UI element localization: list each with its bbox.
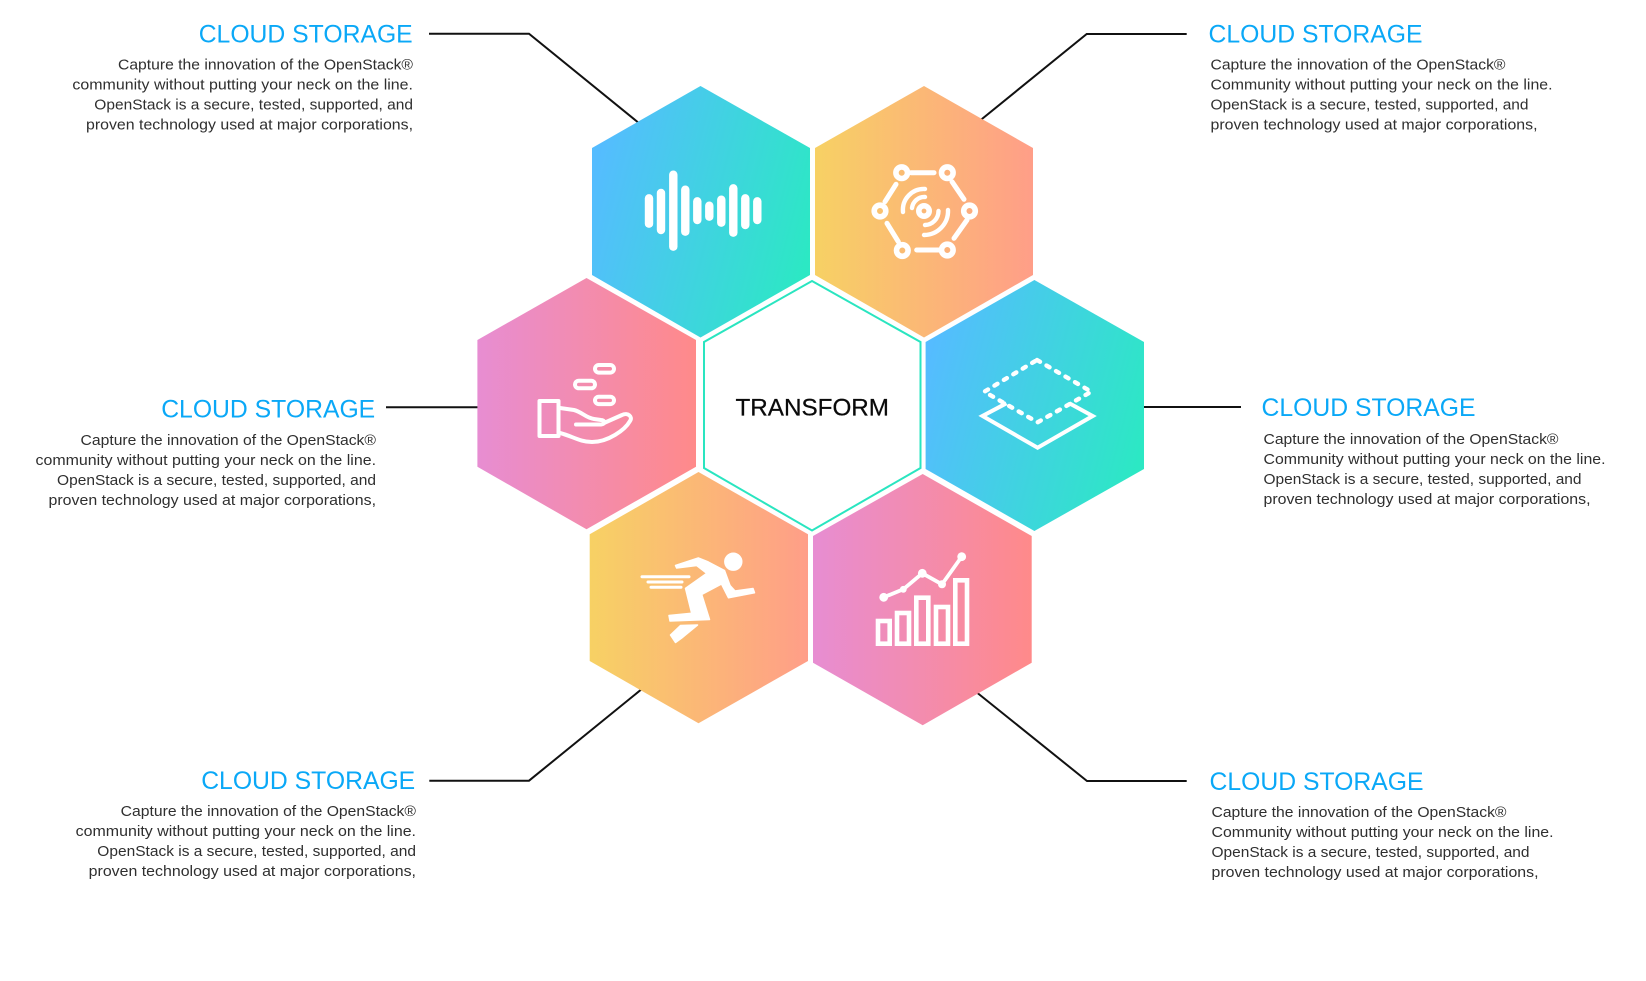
center hexagon with title bbox=[704, 281, 920, 530]
hexagon: blue middle right bbox=[926, 280, 1144, 531]
hexagon: orange top right bbox=[815, 86, 1033, 338]
icon: running person bbox=[642, 552, 754, 642]
heading: CLOUD STORAGE bbox=[1210, 768, 1424, 796]
connector: middle right bbox=[1140, 406, 1241, 408]
body text: Capture the innovation of the OpenStack® bbox=[80, 433, 376, 449]
body text: OpenStack is a secure, tested, supported, and bbox=[1264, 472, 1582, 488]
body text: proven technology used at major corporations, bbox=[1212, 865, 1538, 881]
heading: CLOUD STORAGE bbox=[201, 767, 415, 795]
hexagon: pink bottom right bbox=[813, 474, 1032, 725]
body text: community without putting your neck on the line. bbox=[36, 453, 376, 469]
body text: OpenStack is a secure, tested, supported, and bbox=[1212, 845, 1530, 861]
body text bbox=[1212, 805, 1554, 881]
heading: CLOUD STORAGE bbox=[1208, 21, 1422, 49]
icon: hand with coins bbox=[540, 365, 631, 442]
body text: Capture the innovation of the OpenStack® bbox=[118, 58, 413, 74]
body text: community without putting your neck on the line. bbox=[76, 824, 416, 840]
connector: middle left bbox=[386, 406, 482, 408]
heading: CLOUD STORAGE bbox=[1262, 394, 1476, 422]
body text: proven technology used at major corporations, bbox=[1210, 118, 1538, 134]
body text bbox=[72, 58, 413, 134]
title: transform: TRANSFORM bbox=[736, 395, 889, 422]
panel: text bottom left bbox=[76, 767, 416, 880]
body text bbox=[1264, 432, 1606, 508]
panel: text middle left bbox=[36, 396, 376, 509]
hexagon: pink middle left bbox=[477, 278, 696, 529]
body text: OpenStack is a secure, tested, supported, and bbox=[97, 844, 416, 860]
connector: bottom left bbox=[429, 684, 648, 781]
body text: proven technology used at major corporations, bbox=[1264, 492, 1590, 508]
hexagon: blue top left bbox=[592, 86, 810, 338]
body text: OpenStack is a secure, tested, supported, and bbox=[57, 473, 376, 489]
heading: CLOUD STORAGE bbox=[161, 396, 375, 424]
body text: Community without putting your neck on the line. bbox=[1264, 452, 1606, 468]
panel: text middle right bbox=[1262, 394, 1606, 508]
body text: proven technology used at major corporations, bbox=[89, 864, 416, 880]
body text: Capture the innovation of the OpenStack® bbox=[1264, 432, 1559, 448]
connector: top right bbox=[975, 34, 1187, 125]
body text: OpenStack is a secure, tested, supported, and bbox=[1210, 98, 1528, 114]
icon: connected network bbox=[874, 167, 975, 256]
heading: CLOUD STORAGE bbox=[199, 21, 413, 49]
body text: Capture the innovation of the OpenStack® bbox=[1212, 805, 1507, 821]
hexagon: orange bottom left bbox=[590, 472, 808, 723]
body text: OpenStack is a secure, tested, supported, and bbox=[94, 98, 413, 114]
icon: layers bbox=[982, 360, 1093, 448]
body text: Community without putting your neck on the line. bbox=[1212, 825, 1554, 841]
body text bbox=[76, 804, 416, 880]
body text: Capture the innovation of the OpenStack® bbox=[121, 804, 416, 820]
body text: proven technology used at major corporations, bbox=[86, 118, 413, 134]
body text bbox=[1210, 58, 1552, 134]
body text: Community without putting your neck on the line. bbox=[1210, 78, 1552, 94]
panel: text top left bbox=[72, 21, 413, 134]
panel: text bottom right bbox=[1210, 768, 1554, 881]
body text: proven technology used at major corporations, bbox=[48, 493, 376, 509]
icon: bar chart with trend line bbox=[878, 552, 967, 644]
body text bbox=[36, 433, 376, 509]
icon: sound wave bbox=[649, 175, 757, 247]
panel: text top right bbox=[1208, 21, 1552, 134]
connector: bottom right bbox=[970, 687, 1187, 781]
body text: Capture the innovation of the OpenStack® bbox=[1210, 58, 1506, 74]
connector: top left bbox=[429, 34, 645, 128]
body text: community without putting your neck on the line. bbox=[72, 78, 413, 94]
